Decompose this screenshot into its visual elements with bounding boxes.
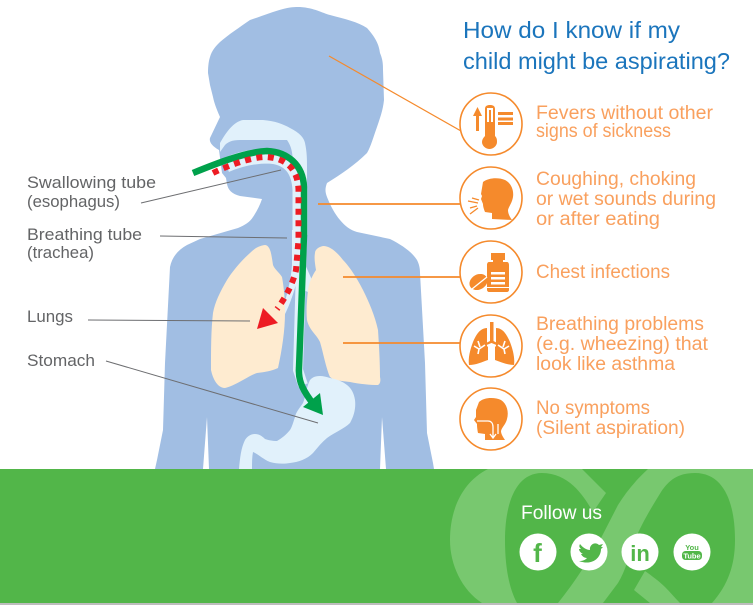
anatomy labels: Swallowing tube xyxy=(27,173,156,192)
text: no symptoms xyxy=(536,398,685,439)
orange leader lines xyxy=(318,56,461,343)
anatomy labels: Lungs xyxy=(27,307,73,326)
swallowing tube xyxy=(298,235,303,385)
text: chest infections: Chest infections xyxy=(536,262,670,283)
title xyxy=(463,17,730,74)
anatomy labels: (esophagus) xyxy=(27,192,120,211)
text: breathing problems: (e.g. wheezing) that xyxy=(536,334,709,355)
airway xyxy=(220,120,307,200)
gray leader lines xyxy=(88,170,318,423)
text: breathing problems: look like asthma xyxy=(536,354,675,375)
text: fevers: Fevers without other xyxy=(536,103,714,124)
text: breathing problems xyxy=(536,314,709,375)
right lung xyxy=(307,246,380,385)
child silhouette xyxy=(155,7,434,469)
anatomy labels: Breathing tube xyxy=(27,225,142,244)
stomach xyxy=(239,376,355,469)
breathing tube xyxy=(226,156,300,235)
icon: facebook: f xyxy=(533,538,542,568)
icon: medicine xyxy=(460,241,522,303)
text: coughing xyxy=(536,169,716,230)
text: fevers: signs of sickness xyxy=(536,121,671,142)
text: breathing problems: Breathing problems xyxy=(536,314,704,335)
icon: linkedin: in xyxy=(630,541,650,566)
icon: youtube xyxy=(674,534,710,570)
anatomy labels: Stomach xyxy=(27,351,95,370)
icon: lungs xyxy=(460,315,522,377)
title: How do I know if my xyxy=(463,17,680,43)
bronchus wedge xyxy=(303,262,312,292)
left lung xyxy=(211,245,285,388)
text: no symptoms: No symptoms xyxy=(536,398,650,419)
anatomy labels xyxy=(27,173,156,370)
icon: linkedin xyxy=(622,534,658,570)
text: coughing: or after eating xyxy=(536,209,660,230)
text: coughing: Coughing, choking xyxy=(536,169,696,190)
icon: silent aspiration head xyxy=(460,388,522,450)
icon: youtube: Tube xyxy=(683,552,701,560)
panel: footer xyxy=(0,469,753,605)
green arrow: swallowing path xyxy=(193,151,323,415)
red dashed arrow: aspiration path xyxy=(213,157,298,329)
panel: body diagram xyxy=(155,7,434,469)
icon: youtube: You xyxy=(685,543,699,552)
text: fevers xyxy=(536,103,714,142)
icon: twitter xyxy=(570,534,608,570)
icon: coughing head xyxy=(460,167,522,229)
follow us heading: Follow us xyxy=(521,503,602,524)
anatomy labels: (trachea) xyxy=(27,243,94,262)
text: coughing: or wet sounds during xyxy=(536,189,716,210)
text: no symptoms: (Silent aspiration) xyxy=(536,418,685,439)
arm gaps xyxy=(203,417,386,469)
lower trachea xyxy=(283,230,302,316)
icon: facebook xyxy=(520,534,556,570)
footer infinity watermark xyxy=(450,469,753,603)
title: child might be aspirating? xyxy=(463,48,730,74)
icon: thermometer xyxy=(460,93,522,155)
